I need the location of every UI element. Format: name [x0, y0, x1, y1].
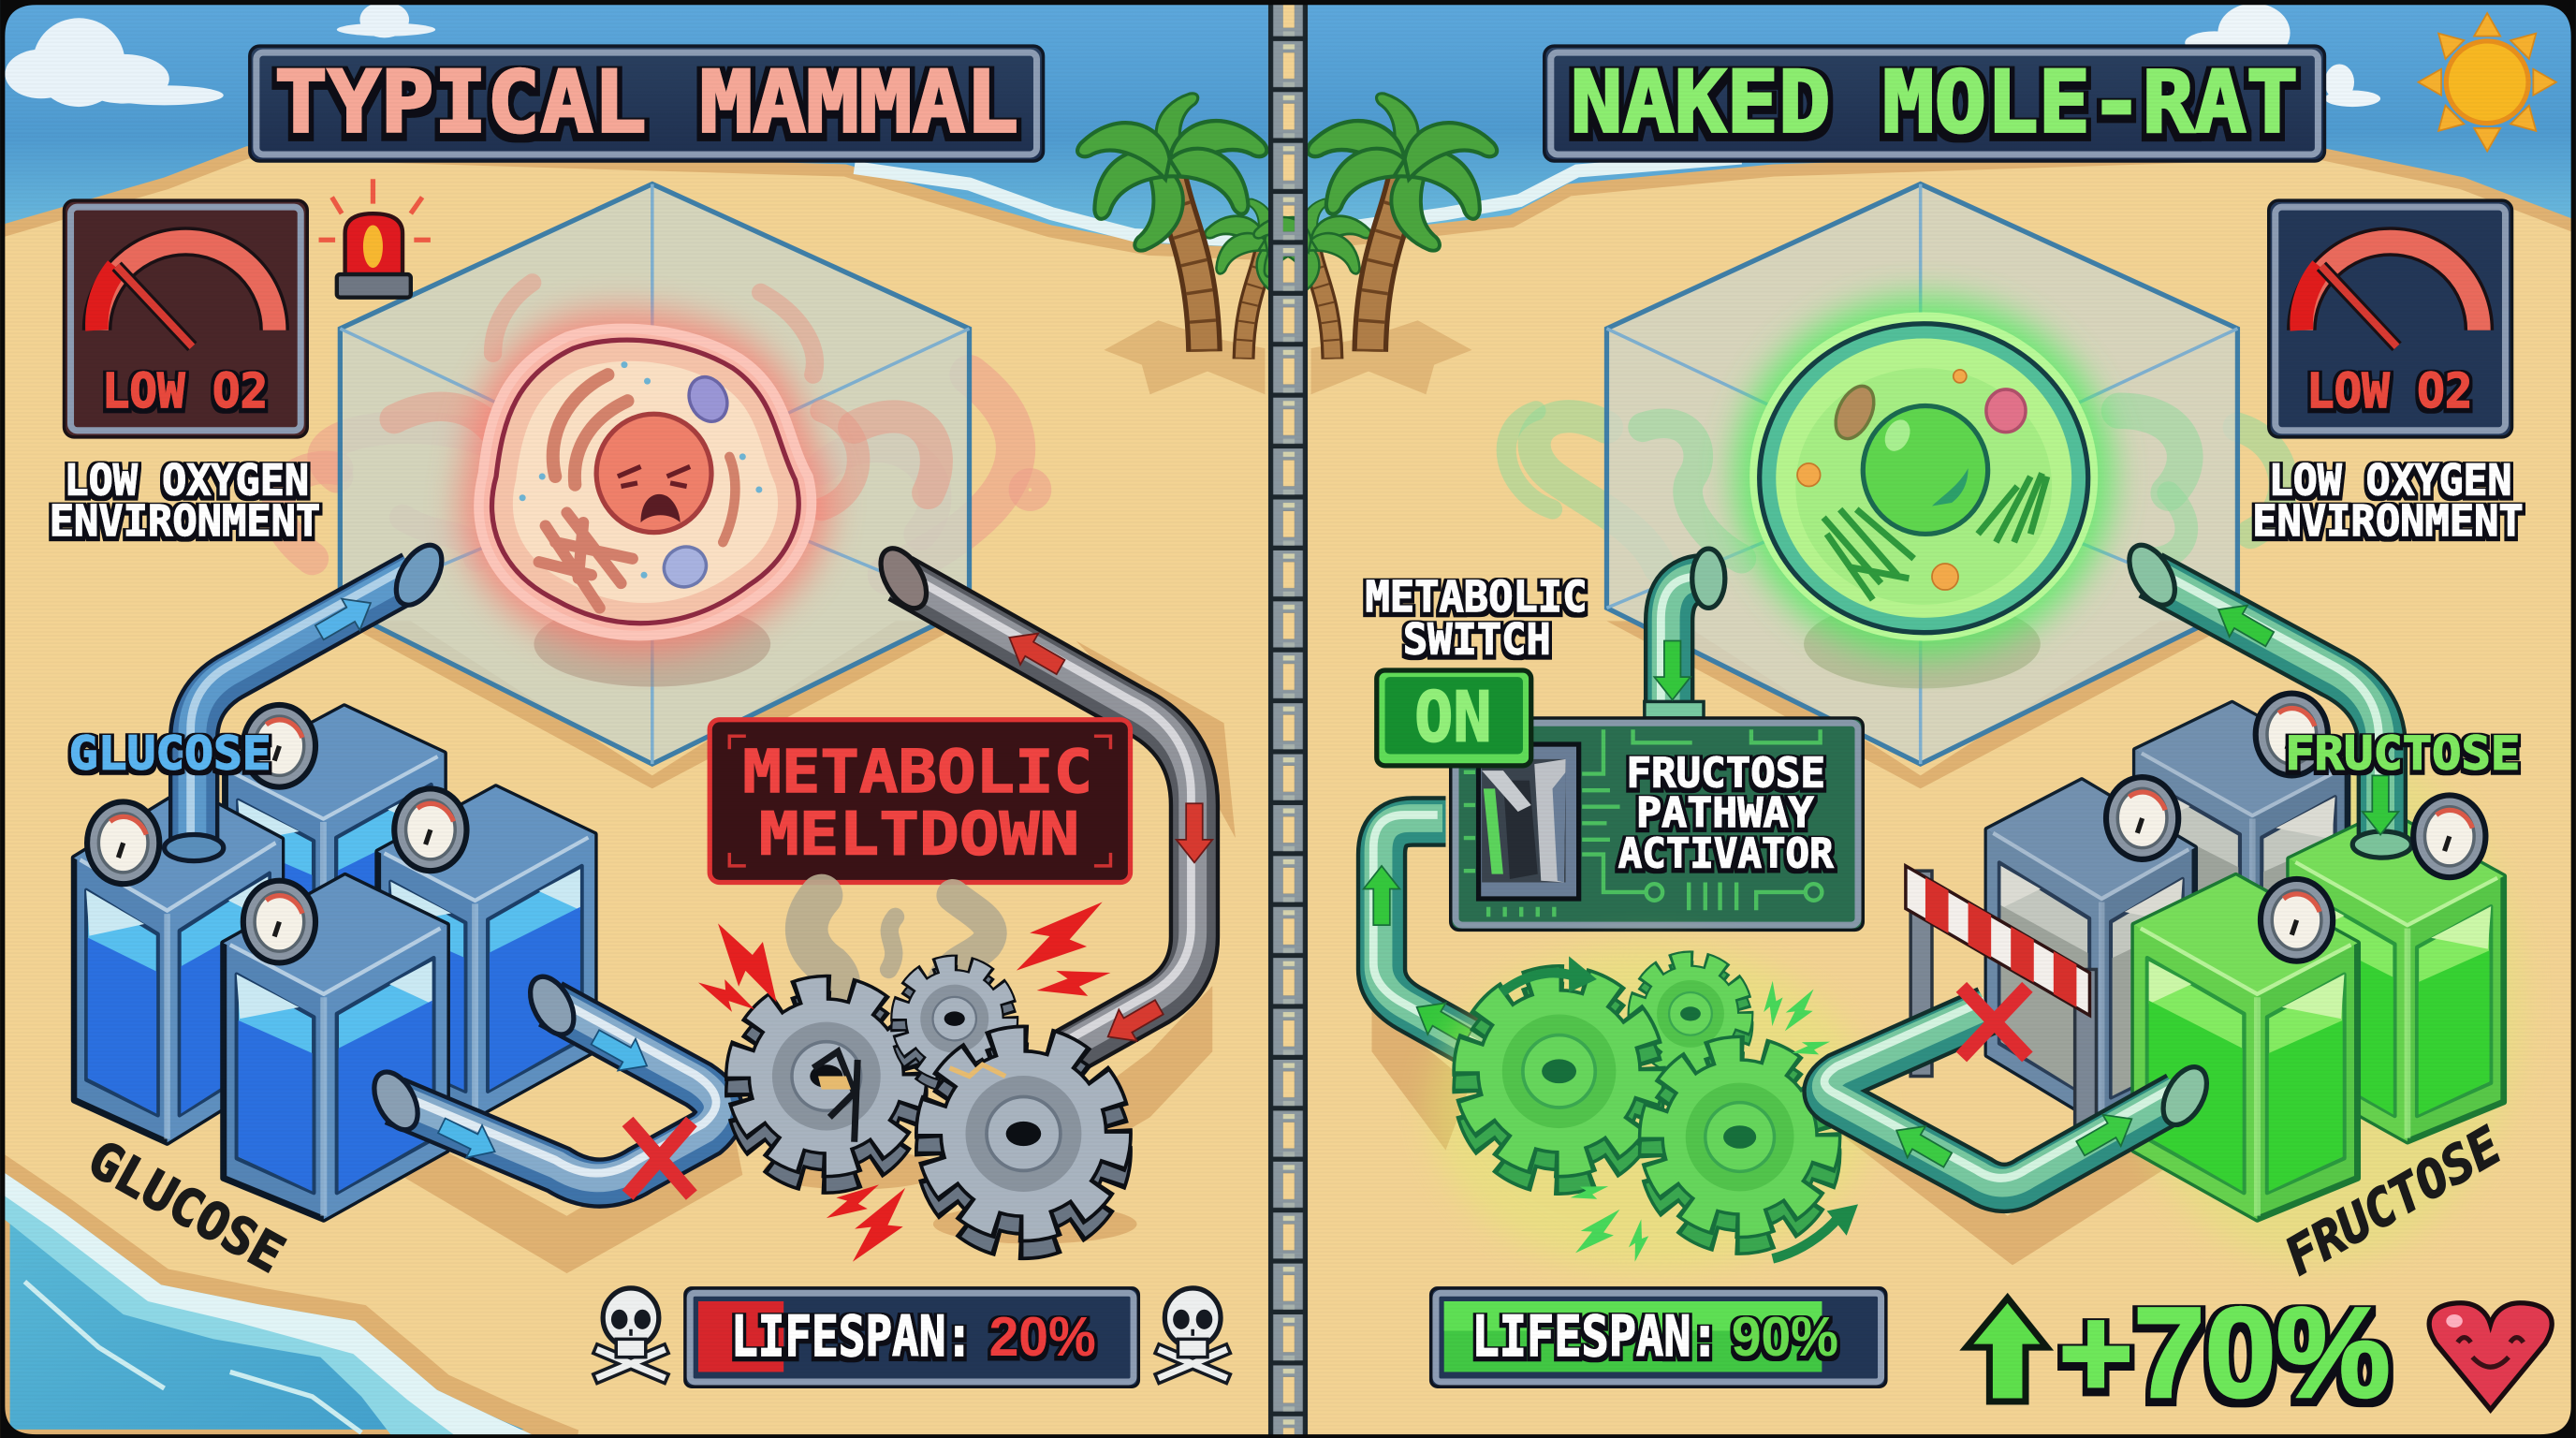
gray tank front — [1987, 781, 2195, 1123]
rotation arrows — [1501, 956, 1858, 1258]
gray tank back — [2135, 703, 2348, 1030]
icon: smiling heart — [2429, 1303, 2552, 1410]
background: left sky and sea — [0, 0, 1268, 248]
cell body — [479, 329, 812, 636]
nucleus — [1863, 405, 1988, 534]
blocked gray glucose tanks — [1987, 703, 2348, 1123]
label: GLUCOSE: GLUCOSE — [69, 726, 271, 780]
tank front — [224, 875, 446, 1219]
panel: right low oxygen gauge: LOW O2 — [2306, 364, 2472, 419]
cell glow — [479, 329, 812, 636]
glass cube — [340, 184, 970, 764]
pipe: gray waste return — [871, 541, 1212, 1052]
text: low oxygen environment right: ENVIRONMENT — [2252, 496, 2524, 546]
cell body — [1749, 312, 2098, 640]
swirls inside cube — [1643, 411, 2187, 559]
pink smoke swirls — [278, 374, 1040, 575]
panel: right low oxygen gauge — [2269, 200, 2511, 437]
icon: skull left — [600, 1288, 662, 1377]
background: right sky and sea — [1308, 0, 2576, 238]
smoke inside cube — [394, 283, 936, 509]
metabolic switch label: METABOLIC — [1365, 572, 1587, 622]
text: low oxygen environment left: ENVIRONMENT — [50, 496, 320, 546]
background: clouds — [5, 2, 2380, 107]
cell shadow — [534, 601, 770, 687]
lever switch — [1479, 744, 1579, 899]
text: low oxygen environment left — [50, 455, 320, 546]
gear right — [1658, 1055, 1822, 1236]
stat: +70%: +70% — [2058, 1282, 2391, 1425]
cell glow — [1749, 312, 2098, 640]
text: low oxygen environment right — [2252, 455, 2524, 546]
icon: palm trees left — [1076, 86, 1324, 360]
icon: skull right — [1162, 1288, 1224, 1377]
pipe: fructose feed — [2120, 537, 2411, 858]
icon: palm trees right — [1252, 86, 1499, 360]
metabolic switch label — [1365, 572, 1587, 665]
ground shadows left — [340, 621, 1236, 1273]
panel: left low oxygen gauge: LOW O2 — [102, 364, 268, 419]
icon: sun — [2418, 13, 2556, 151]
tank right — [378, 787, 594, 1117]
organelles — [1797, 370, 2047, 600]
panel: left low oxygen gauge — [65, 200, 307, 437]
green swirls — [1506, 411, 2283, 566]
gauges on right tanks — [2106, 694, 2485, 961]
pipe: fructose to gears, blocked glucose branch — [1824, 1001, 2216, 1188]
gear left — [1472, 985, 1646, 1175]
lifespan bar left: 20% — [989, 1305, 1096, 1368]
lifespan bar right: LIFESPAN: — [1472, 1305, 1719, 1370]
broken gray gears — [744, 967, 1111, 1240]
lightning: green sparks — [1568, 981, 1830, 1262]
ground shadows right — [1372, 621, 2237, 1265]
lifespan bar right — [1431, 1288, 1886, 1387]
icon: red alarm beacon — [319, 179, 431, 298]
purple organelles — [657, 371, 734, 594]
panel: fructose pathway activator — [1451, 718, 1863, 930]
label: FRUCTOSE: FRUCTOSE — [2285, 726, 2520, 780]
smoke above broken gears — [807, 895, 990, 1035]
panel text — [1618, 750, 1834, 878]
text: low oxygen environment left: LOW OXYGEN — [65, 455, 309, 505]
title left: TYPICAL MAMMAL: TYPICAL MAMMAL — [274, 51, 1018, 152]
lifespan bar left — [685, 1288, 1138, 1387]
callout: metabolic meltdown: METABOLIC — [742, 737, 1092, 806]
callout: metabolic meltdown: MELTDOWN — [759, 800, 1079, 869]
right glass cube with healthy cell — [1506, 184, 2283, 764]
green tank rear — [2290, 812, 2504, 1141]
center divider chain — [1268, 0, 1308, 1438]
tank back — [225, 707, 444, 1033]
green healthy gears — [1472, 962, 1822, 1236]
fructose tanks — [2120, 537, 2504, 1219]
glass cube — [1606, 184, 2237, 764]
label: FRUCTOSE on sand: FRUCTOSE — [2276, 1116, 2512, 1286]
icon: red X on pipe — [633, 1127, 687, 1190]
green glow around gears — [1429, 945, 1873, 1273]
button: ON — [1377, 670, 1531, 766]
background: bottom-left ocean — [0, 1164, 575, 1438]
gear top — [1640, 962, 1741, 1075]
callout: metabolic meltdown — [710, 720, 1131, 882]
pipe: glucose to gears blocked — [365, 970, 720, 1183]
pipe: fructose into cell — [1645, 549, 1725, 718]
green tank front — [2134, 875, 2358, 1219]
title right: NAKED MOLE-RAT: NAKED MOLE-RAT — [1571, 51, 2298, 152]
barrier — [1906, 866, 2096, 1134]
icon: green up arrow — [1967, 1298, 2047, 1401]
pipe: switch to gears — [1364, 814, 1486, 1052]
lightning: red sparks — [698, 902, 1111, 1262]
label: GLUCOSE on sand: GLUCOSE — [79, 1129, 294, 1284]
left glass cube with stressed cell — [278, 184, 1040, 764]
palm shadows — [1104, 320, 1472, 394]
panel text: PATHWAY — [1636, 789, 1814, 837]
nucleus with sad face — [596, 414, 711, 533]
gear top — [902, 967, 1006, 1080]
gauges on glucose tanks — [87, 705, 466, 962]
lifespan bar left: LIFESPAN: — [731, 1305, 973, 1370]
panel text: FRUCTOSE — [1627, 750, 1825, 798]
icon: red X on blocked pipe — [1967, 992, 2022, 1051]
glucose tanks — [74, 707, 594, 1219]
organelles — [539, 374, 735, 608]
button: ON: ON — [1414, 679, 1492, 758]
text: low oxygen environment right: LOW OXYGEN — [2269, 455, 2511, 505]
cell shadow — [1804, 600, 2041, 688]
lifespan bar right: 90% — [1732, 1305, 1838, 1368]
gear right — [936, 1046, 1111, 1240]
pipe: glucose feed to cell — [165, 537, 451, 861]
tank left — [74, 788, 282, 1142]
circuit traces — [1464, 729, 1822, 917]
panel text: ACTIVATOR — [1618, 830, 1834, 878]
metabolic switch label: SWITCH — [1403, 615, 1551, 665]
small vesicles — [520, 361, 762, 579]
green glow around tanks — [2111, 740, 2522, 1265]
gear left — [744, 994, 909, 1175]
